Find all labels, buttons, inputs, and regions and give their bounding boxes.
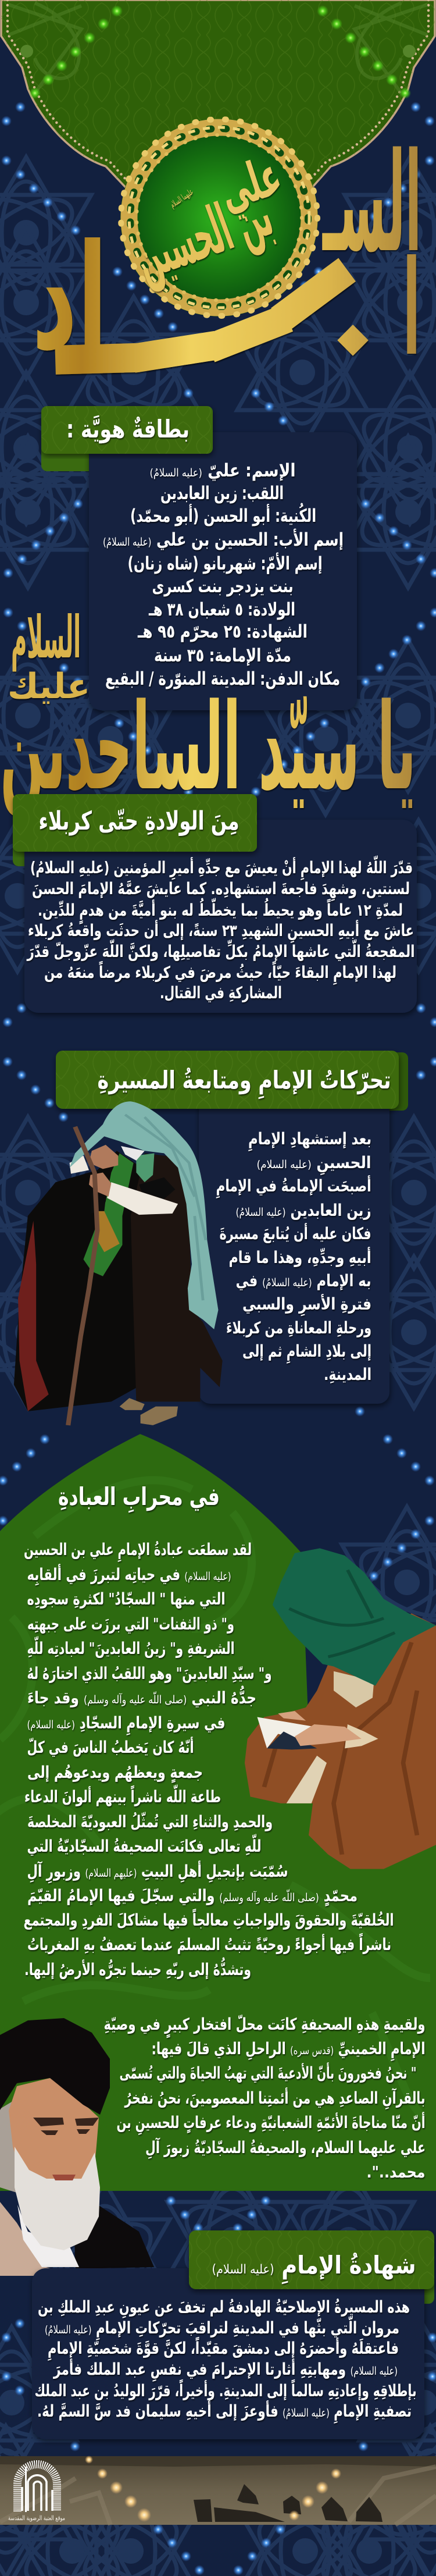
hands bbox=[89, 1145, 118, 1197]
tag back tab bbox=[395, 2269, 434, 2304]
identity heading tag: بطاقةٌ هويَّة : bbox=[66, 415, 190, 444]
logo caption: موقع العتبة الرضوية المقدسة bbox=[8, 2514, 65, 2522]
paragraph: worship: و" ذو الثفنات" التي برزَت على جبهتِه bbox=[27, 1614, 234, 1634]
identity details text: إسم الأمّ: شهربانو (شاه زنان) bbox=[128, 552, 322, 574]
medallion calligraphy: عليهما السلام bbox=[168, 187, 195, 210]
glowing lights bbox=[85, 2456, 341, 2522]
medallion calligraphy bbox=[124, 144, 289, 294]
paragraph bbox=[35, 2297, 416, 2424]
gold greeting: السلام عليك bbox=[8, 603, 90, 707]
face bbox=[9, 2078, 99, 2182]
paragraph: الحسينِ (عليه السلام) bbox=[257, 1153, 371, 1175]
header green arch bbox=[1, 0, 435, 187]
text card panel bbox=[24, 820, 417, 1013]
text: السلام bbox=[11, 603, 81, 671]
black glove bbox=[90, 1177, 175, 1214]
paragraph: worship: لقد سطعَت عبادةُ الإمامِ علي بن الحسين bbox=[24, 1540, 252, 1562]
paragraph: worship: طاعة اللّه ناشراً بينهم ألوانَ الدعاء bbox=[24, 1784, 221, 1806]
identity heading tag bbox=[41, 406, 213, 454]
paragraph: worship: للّهِ تعالى فكانَت الصحيفةُ السجّاديّةُ التي bbox=[27, 1834, 262, 1856]
white sleeve bbox=[107, 1182, 178, 1215]
paragraph: المدينةِ. bbox=[324, 1365, 371, 1384]
white beard bbox=[15, 2147, 100, 2250]
paragraph bbox=[26, 855, 415, 1002]
paragraph: worship bbox=[23, 1540, 394, 1980]
green scarf bbox=[83, 1153, 134, 1276]
paragraph: إلى بلادِ الشامِ ثم إلى bbox=[242, 1342, 371, 1364]
medallion calligraphy: علي bbox=[212, 144, 289, 222]
paragraph: تصفيةِ الإمامِ (عليه السلامُ) فأوعزَ إلى أخيهِ سليمان فد سَّ السمَّ لهُ. bbox=[37, 2400, 412, 2424]
text card panel bbox=[32, 2268, 424, 2439]
identity details text: مدّة الإمامة: ٣٥ سنة bbox=[154, 645, 291, 666]
identity details text: الولادة: ٥ شعبان ٣٨ هـ bbox=[148, 599, 295, 620]
cream undergarment bbox=[334, 1671, 374, 1707]
identity details text bbox=[103, 460, 344, 689]
section: martyrdom of the Imam bbox=[32, 2230, 434, 2439]
paragraph: المشاركةِ في القتال. bbox=[160, 983, 282, 1002]
photo strip: Baqi graves bbox=[0, 2456, 436, 2525]
black turban bbox=[0, 2018, 110, 2115]
identity details text: بنت يزدجر بنت كسرى bbox=[152, 576, 293, 597]
section heading: in the mihrab: في محرابِ العبادةِ bbox=[58, 1482, 220, 1513]
identity card panel bbox=[89, 432, 357, 710]
red striped lining bbox=[18, 1221, 49, 1411]
section: in the mihrab of worship bbox=[0, 1434, 436, 2191]
main gold title: السجاد: ◆ bbox=[337, 313, 369, 361]
portrait: Imam Khomeini bbox=[0, 2018, 154, 2276]
identity details text: إسم الأب: الحسين بن علي (عليه السلامُ) bbox=[103, 528, 344, 550]
paragraph: Khomeini quote bbox=[103, 2015, 426, 2182]
tag back tab bbox=[13, 826, 48, 866]
paragraph bbox=[216, 1129, 371, 1384]
right figure brown-black robe bbox=[131, 1153, 223, 1401]
brown robe bbox=[245, 1613, 436, 1869]
paragraph: worship: الشريفةِ و" زينُ العابدينَ" لعبادتِه للّهِ bbox=[27, 1636, 235, 1658]
hands bbox=[278, 1711, 362, 1746]
paragraph: worship: أنّهُ كان يَخطبُ الناسَ في كلّ bbox=[27, 1737, 194, 1757]
teal shawl bbox=[70, 1101, 218, 1329]
paragraph: worship: وتشدُّهُ إلى ربّهِ حينما تجرُّه الأرضُ إليها. bbox=[24, 1958, 251, 1980]
identity details text: الشهادة: ٢٥ محرّم ٩٥ هـ bbox=[137, 621, 308, 642]
cream trousers bbox=[287, 1756, 327, 1803]
heading tag: شهادةُ الإمامِ (عليه السلام) bbox=[212, 2251, 416, 2284]
text card panel bbox=[199, 1094, 389, 1404]
paragraph: بعد إستشهادِ الإمامِ bbox=[248, 1129, 371, 1151]
identity details text: مكان الدفن: المدينة المنوّرة / البقيع bbox=[105, 668, 340, 689]
section: identity card bbox=[41, 406, 357, 710]
logo bbox=[17, 2464, 57, 2512]
paragraph: فترةِ الأسرِ والسبي bbox=[242, 1294, 371, 1317]
main gold title: السجاد: اد bbox=[32, 213, 108, 382]
gold greeting: السلام عليك: عليك bbox=[8, 666, 90, 707]
tag back layer bbox=[349, 1052, 408, 1111]
section: birth to Karbala bbox=[13, 794, 417, 1013]
identity details text: الإسم: عليّ (عليه السلامُ) bbox=[149, 460, 295, 481]
light robe bbox=[0, 2202, 78, 2276]
paragraph: (عليه السلام) ومهابتِهِ أثارتا الإحترامَ في نفسِ عبد الملك فأمرَ bbox=[52, 2358, 398, 2382]
heading tag: مِنَ الولادةِ حتّى كربلاء bbox=[38, 806, 240, 836]
book bbox=[257, 1717, 314, 1748]
heading tag bbox=[56, 1051, 399, 1109]
paragraph: به الإمام (عليه السلامُ) في bbox=[236, 1271, 371, 1290]
heading tag bbox=[13, 794, 257, 852]
figure: reading man in brown robe bbox=[245, 1548, 436, 1869]
paragraph: فكان عليه أن يُتابعَ مسيرةَ bbox=[220, 1223, 371, 1243]
identity details text: الكُنية: أبو الحسن (أبو محمّد) bbox=[130, 503, 316, 526]
black robe bbox=[73, 2199, 154, 2269]
paragraph: worship: والحمدِ والثناءِ التي تُمثّلُ العبوديّةَ المخلصةَ bbox=[27, 1812, 273, 1831]
paragraph: Khomeini quote: محمد..". bbox=[366, 2162, 426, 2182]
identity details text: اللقب: زين العابدين bbox=[160, 483, 284, 504]
paragraph: worship: و" سيّدِ العابدينَ" وهو اللقبُ الذي اختارَهُ لهُ bbox=[27, 1664, 272, 1683]
boots bbox=[120, 1398, 178, 1425]
yellow cloth bbox=[95, 1211, 120, 1252]
section: the Imam's movements bbox=[56, 1051, 408, 1404]
left figure black robe bbox=[14, 1151, 142, 1411]
paragraph: ورحلةِ المعاناةِ من كربلاءَ bbox=[226, 1318, 371, 1337]
paragraph: worship: سُمّيَت بإنجيلِ أهلِ البيتِ (عليهم السلام) وزبورِ آلِ bbox=[27, 1860, 288, 1884]
paragraph: زين العابدين (عليه السلامُ) bbox=[236, 1201, 371, 1220]
paragraph: worship: جمعةٍ ويعظهُم ويدعوهُم إلى bbox=[27, 1763, 203, 1783]
teal neck scarf bbox=[136, 1153, 154, 1182]
green hood bbox=[273, 1548, 436, 1686]
mouth bbox=[52, 2175, 76, 2180]
paragraph: worship: جدُّهُ النبي (صلى اللّه عليه وآله وسلم) وقد جاءَ bbox=[27, 1686, 256, 1707]
heading tag bbox=[189, 2230, 434, 2289]
green mihrab shape bbox=[0, 1434, 436, 2191]
white face cloth bbox=[121, 1146, 145, 1161]
eyes and brows bbox=[33, 2118, 99, 2135]
medallion: Ali ibn al-Husayn bbox=[120, 119, 318, 316]
paragraph: أبيهِ وجدِّهِ، وهذا ما قام bbox=[229, 1247, 371, 1267]
figure: two embracing mourners with staff bbox=[14, 1101, 223, 1425]
paragraph: worship: (عليه السلام) في حياتِه لتبرزَ في ألقابِه bbox=[27, 1564, 231, 1586]
paragraph: worship: في سيرةِ الإمامِ السجّادِ (عليه السلام) bbox=[27, 1713, 226, 1735]
main gold title: السجاد bbox=[32, 124, 421, 385]
grey side hair bbox=[0, 2100, 19, 2193]
grave stones bbox=[194, 2484, 383, 2522]
wooden staff bbox=[68, 1127, 97, 1425]
identity tag back tab bbox=[41, 430, 99, 471]
paragraph: worship: محمّدٍ (صلى اللّه عليه وآله وسلم) والتي سجّلَ فيها الإمامُ القيّمَ bbox=[27, 1886, 358, 1906]
paragraph: أصبحَت الإمامةُ في الإمامِ bbox=[216, 1175, 371, 1198]
paragraph: worship: التي منها " السجّادُ" لكثرةِ سجودِه bbox=[27, 1589, 226, 1609]
